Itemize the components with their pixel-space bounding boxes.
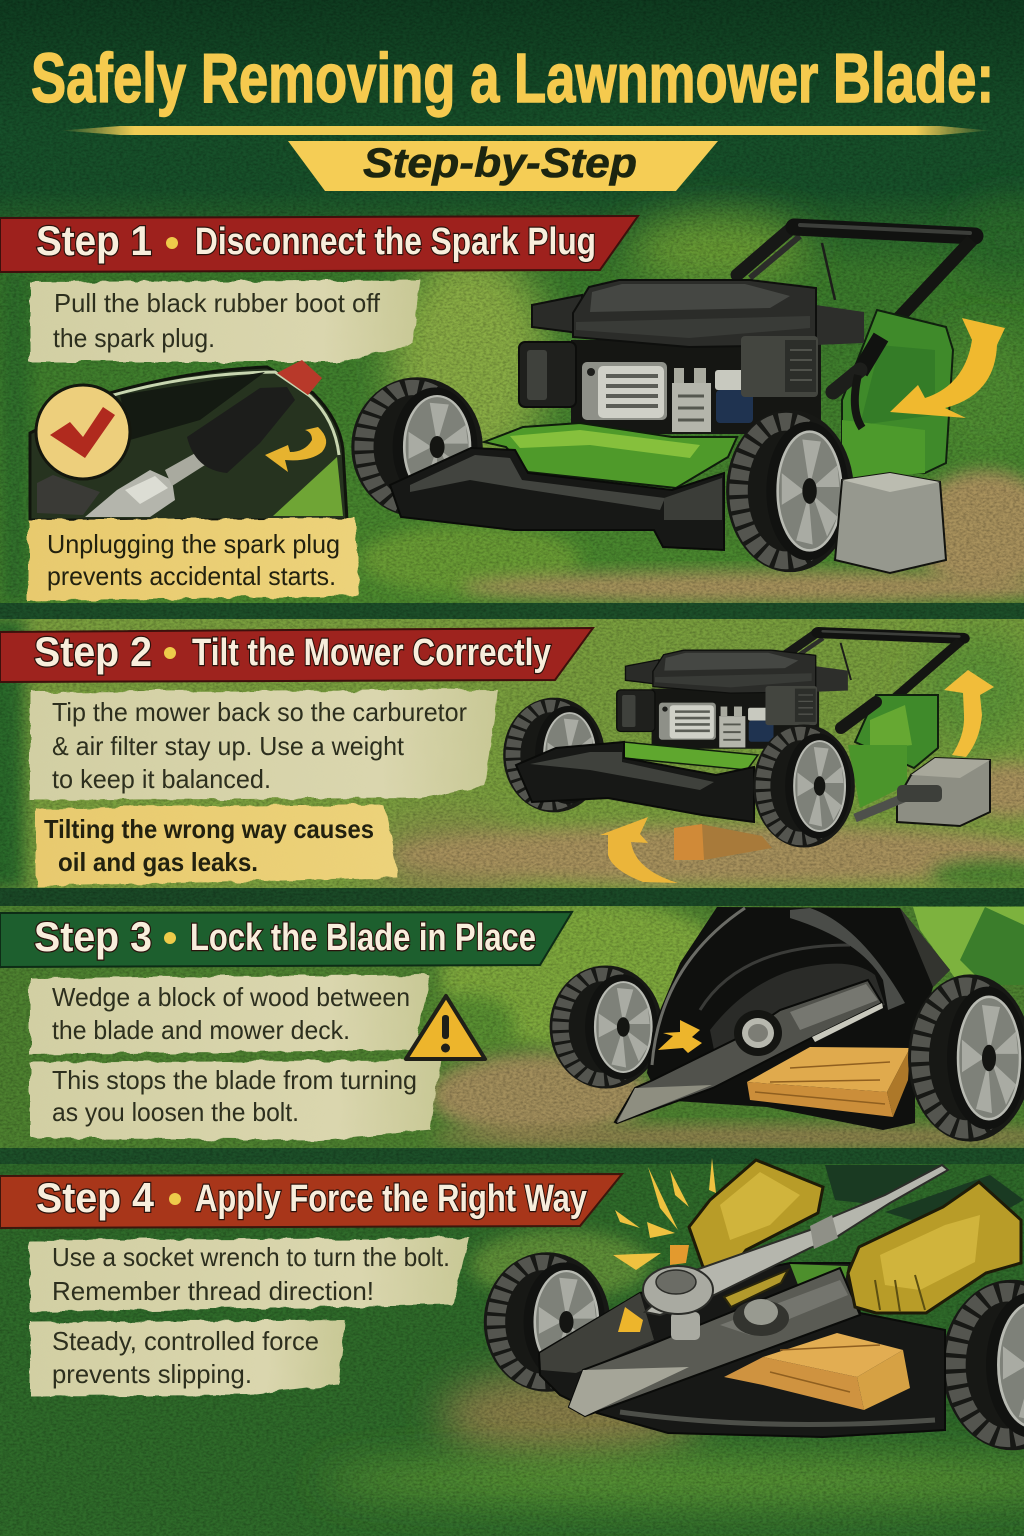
subtitle ribbon: [60, 126, 990, 191]
icon: red check mark: [36, 385, 130, 479]
glove: left hand: [689, 1160, 823, 1270]
spark plug: [85, 446, 216, 517]
step 4 text: prevents slipping.: [52, 1359, 252, 1389]
arrow: handle up: [944, 670, 994, 757]
arrow: tilt back: [890, 318, 1005, 418]
illustration: mower on stone: [351, 225, 1005, 573]
step 2 warning note: oil and gas leaks.: [58, 847, 258, 877]
red cap: [277, 360, 322, 395]
step 3 text: as you loosen the bolt.: [52, 1097, 299, 1127]
step 4 text: [30, 1238, 470, 1396]
arrow: pull direction: [265, 427, 326, 472]
illustration: wrench on bolt: [484, 1158, 1024, 1450]
step 1 banner: [0, 216, 638, 272]
step 3 text: [30, 975, 440, 1140]
panel: step 3: [0, 907, 1024, 1142]
blade: [569, 1268, 860, 1416]
step 4 text: Steady, controlled force: [52, 1326, 319, 1356]
step 1 text: [30, 280, 420, 362]
step 4 banner: Step 4: [36, 1174, 155, 1221]
step 4 text: Use a socket wrench to turn the bolt.: [52, 1242, 450, 1272]
glove fingers under wrench: [724, 1270, 788, 1307]
step 3 text: the blade and mower deck.: [52, 1015, 350, 1045]
arrow: deck lift: [600, 817, 678, 883]
step 2 banner: [0, 628, 593, 682]
icon: warning triangle: [406, 996, 485, 1059]
panel: step 2: [0, 628, 994, 886]
illustration: tilted mower: [503, 631, 994, 883]
step 2 banner: Tilt the Mower Correctly: [192, 632, 551, 674]
step 3 text: This stops the blade from turning: [52, 1065, 417, 1095]
socket wrench: [643, 1165, 948, 1340]
stone block: [835, 473, 946, 573]
subtitle ribbon: Step-by-Step: [363, 139, 637, 186]
step 3 banner: Step 3: [34, 913, 152, 960]
icon: spark: [658, 1020, 702, 1053]
step 2 warning note: [36, 804, 398, 886]
step 3 banner: Lock the Blade in Place: [190, 917, 536, 959]
panel: step 4: [0, 1158, 1024, 1450]
step 1 warning note: [28, 518, 360, 601]
illustration: blade locked with wood: [550, 907, 1024, 1142]
blade: [615, 980, 883, 1123]
glove: right hand: [848, 1182, 1021, 1313]
panel: step 1: [0, 216, 1005, 601]
wood block: [724, 1333, 910, 1410]
wood block: [674, 824, 772, 860]
step 2 text: [30, 690, 498, 800]
step 3 banner: [0, 912, 572, 967]
step 1 text: the spark plug.: [53, 323, 215, 353]
bolt: [733, 1299, 789, 1336]
step 4 banner: Apply Force the Right Way: [195, 1178, 587, 1220]
step 2 text: Tip the mower back so the carburetor: [52, 697, 467, 727]
step 1 banner: Disconnect the Spark Plug: [195, 221, 596, 263]
spark plug inset: [30, 360, 347, 520]
step 4 banner: [0, 1174, 622, 1228]
stone weight: [855, 758, 990, 826]
rubber boot: [187, 387, 295, 473]
step 4 text: Remember thread direction!: [52, 1276, 374, 1306]
step 2 banner: Step 2: [34, 628, 152, 675]
step 1 banner: Step 1: [36, 217, 152, 264]
step 2 text: to keep it balanced.: [52, 764, 271, 794]
step 1 text: Pull the black rubber boot off: [54, 288, 381, 318]
step 2 text: & air filter stay up. Use a weight: [52, 731, 405, 761]
icon: force sparks: [613, 1158, 716, 1270]
wood block: [747, 1047, 910, 1117]
step 2 warning note: Tilting the wrong way causes: [44, 814, 374, 844]
step 1 warning note: Unplugging the spark plug: [47, 529, 340, 559]
step 3 text: Wedge a block of wood between: [52, 982, 410, 1012]
step 1 warning note: prevents accidental starts.: [47, 561, 336, 591]
mower deck: [539, 1263, 945, 1437]
